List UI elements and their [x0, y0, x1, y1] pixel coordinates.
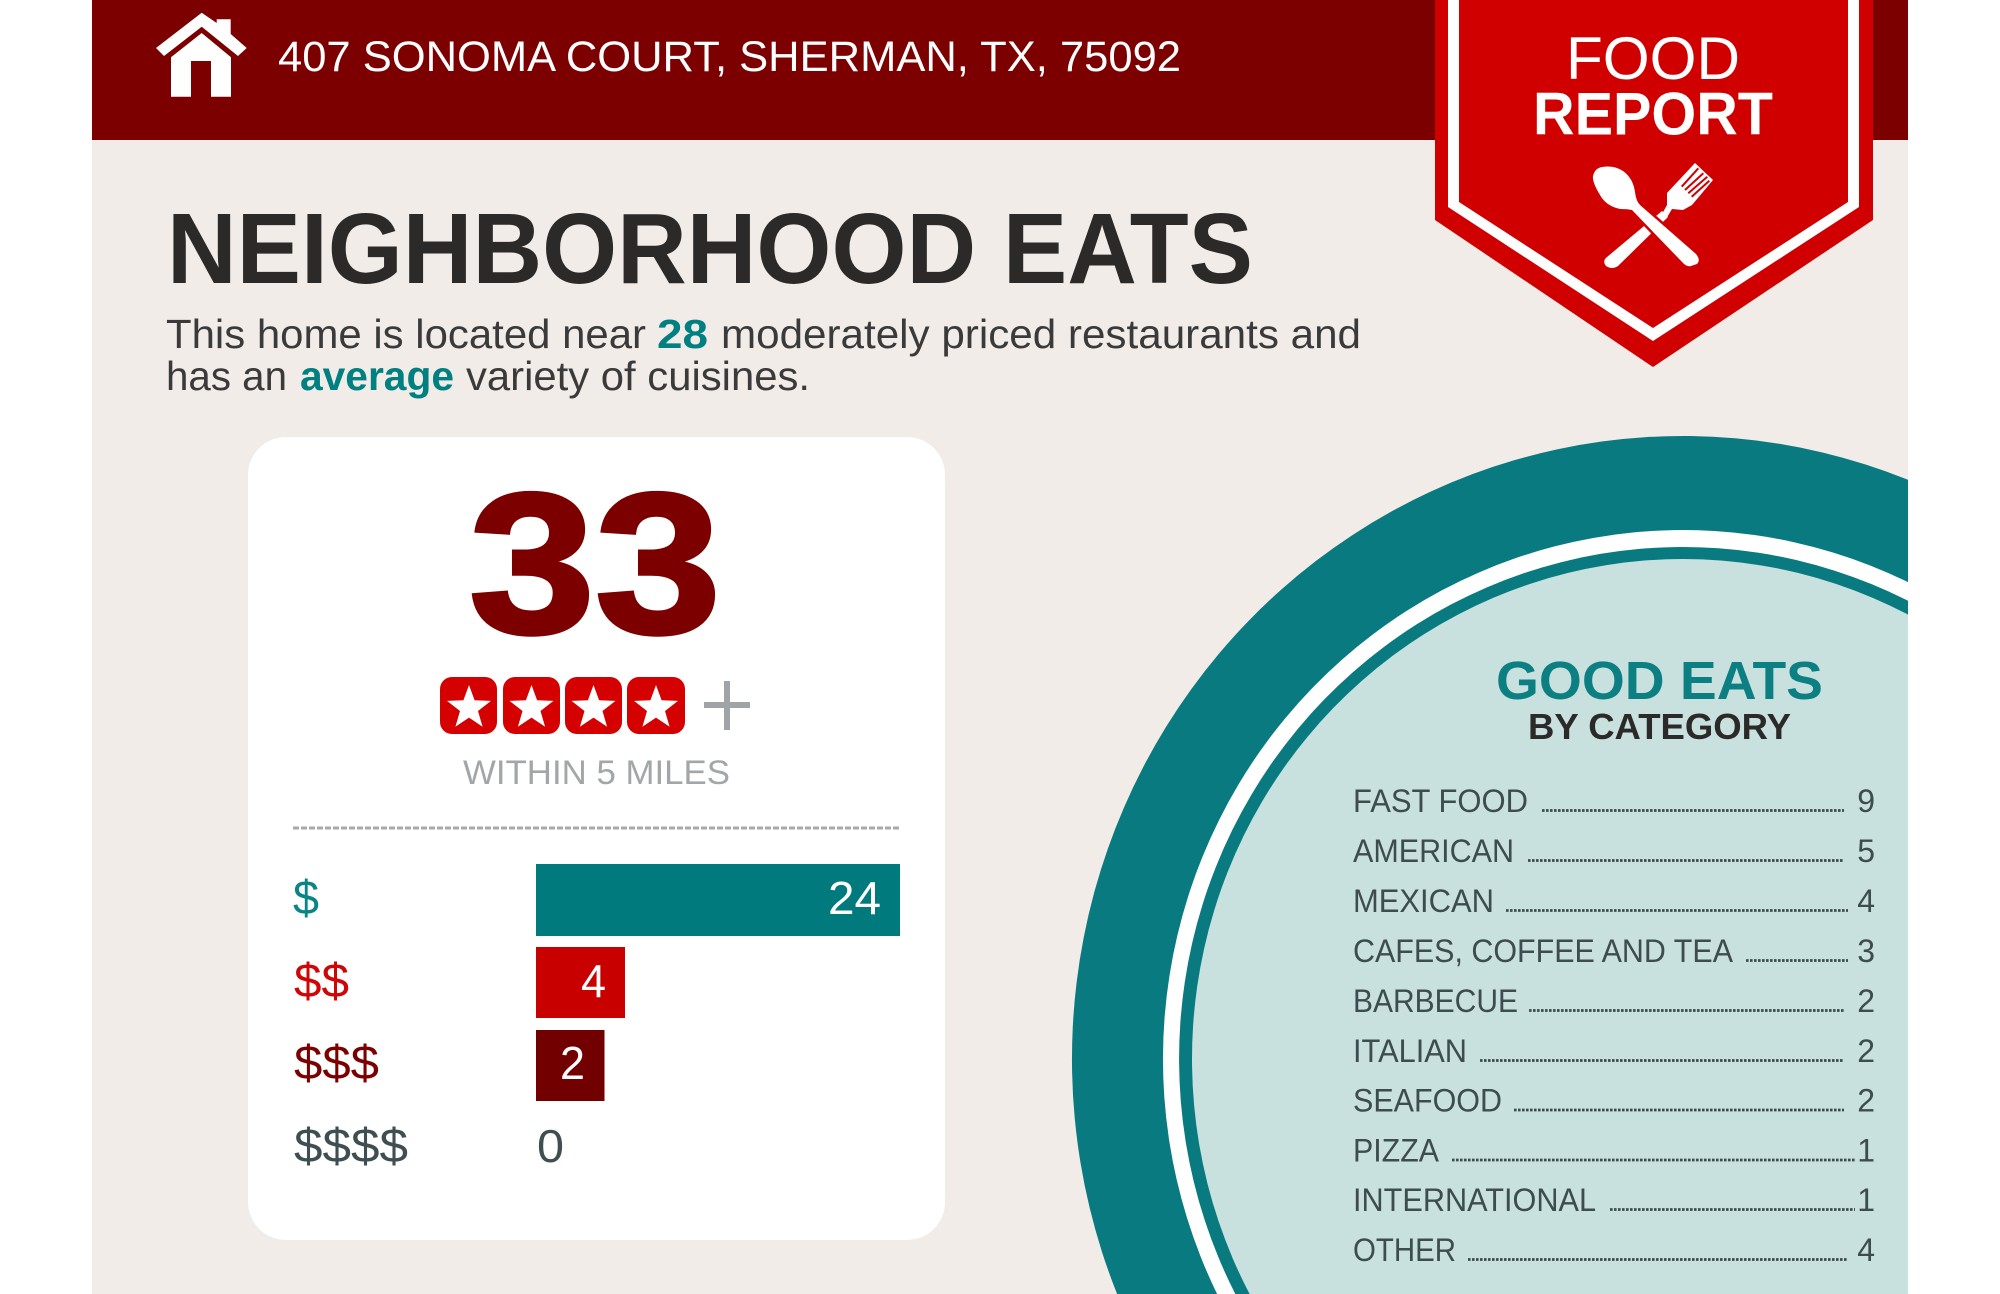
- icon: house: [156, 13, 247, 97]
- row: four dollars: $$$$: [294, 1120, 408, 1173]
- row: international: INTERNATIONAL: [1353, 1182, 1596, 1218]
- category heading: [1496, 651, 1823, 747]
- row: barbecue: BARBECUE: [1353, 983, 1518, 1019]
- row: other: OTHER: [1353, 1232, 1456, 1268]
- row: american: AMERICAN: [1353, 833, 1514, 869]
- row: seafood: 2: [1857, 1082, 1875, 1118]
- panel: restaurant count card: [248, 437, 945, 1240]
- intro text: moderately priced restaurants and: [721, 311, 1361, 357]
- row: cafes: 3: [1857, 933, 1875, 969]
- intro text: [166, 311, 1361, 399]
- row: four dollars: 0: [537, 1120, 564, 1172]
- category heading: GOOD EATS: [1496, 651, 1823, 711]
- food report ribbon badge: [1435, 0, 1873, 367]
- badge title: FOOD: [1566, 25, 1740, 92]
- header bar: [92, 0, 1908, 140]
- row: mexican: [1353, 883, 1875, 919]
- row: two dollars: $$: [294, 955, 349, 1008]
- icon: fork and spoon: [1593, 163, 1713, 268]
- row: barbecue: [1353, 983, 1875, 1019]
- row: american: [1353, 833, 1875, 869]
- panel: good eats by category circle: [1072, 436, 1908, 1294]
- badge title: REPORT: [1533, 80, 1773, 148]
- row: fast food: [1353, 783, 1875, 819]
- row: pizza: 1: [1857, 1132, 1875, 1168]
- price bar chart: [293, 864, 900, 1173]
- row: italian: ITALIAN: [1353, 1033, 1467, 1069]
- intro text: This home is located near: [166, 311, 646, 357]
- address: 407 SONOMA COURT, SHERMAN, TX, 75092: [278, 33, 1181, 81]
- category list: [1353, 783, 1875, 1268]
- row: italian: [1353, 1033, 1875, 1069]
- row: american: 5: [1857, 833, 1875, 869]
- row: cafes: CAFES, COFFEE AND TEA: [1353, 933, 1734, 969]
- intro text: variety of cuisines.: [466, 353, 810, 399]
- big number: 33: [469, 452, 721, 676]
- row: one dollar: 24: [828, 872, 881, 924]
- row: three dollars: $$$: [294, 1037, 379, 1090]
- intro text: average: [300, 353, 454, 399]
- within 5 miles caption: WITHIN 5 MILES: [463, 754, 730, 792]
- row: three dollars: [294, 1030, 604, 1101]
- row: other: 4: [1857, 1232, 1875, 1268]
- intro text: 28: [657, 311, 708, 357]
- row: seafood: [1353, 1082, 1875, 1118]
- row: mexican: 4: [1857, 883, 1875, 919]
- row: seafood: SEAFOOD: [1353, 1082, 1502, 1118]
- row: one dollar: $: [293, 872, 319, 925]
- row: two dollars: 4: [581, 955, 606, 1007]
- four star rating: [440, 677, 685, 734]
- row: three dollars: 2: [560, 1037, 585, 1089]
- row: other: [1353, 1232, 1875, 1268]
- row: pizza: PIZZA: [1353, 1132, 1440, 1168]
- row: one dollar: [293, 864, 900, 936]
- row: two dollars: [294, 947, 625, 1018]
- row: four dollars: [294, 1120, 564, 1173]
- row: fast food: 9: [1857, 783, 1875, 819]
- row: international: 1: [1857, 1182, 1875, 1218]
- row: fast food: FAST FOOD: [1353, 783, 1528, 819]
- badge title: [1533, 25, 1773, 148]
- category heading: BY CATEGORY: [1528, 706, 1791, 747]
- row: mexican: MEXICAN: [1353, 883, 1494, 919]
- row: international: [1353, 1182, 1875, 1218]
- title: NEIGHBORHOOD EATS: [167, 193, 1253, 305]
- plus sign: [704, 681, 750, 730]
- intro text: has an: [166, 353, 287, 399]
- row: italian: 2: [1857, 1033, 1875, 1069]
- row: barbecue: 2: [1857, 983, 1875, 1019]
- row: pizza: [1353, 1132, 1875, 1168]
